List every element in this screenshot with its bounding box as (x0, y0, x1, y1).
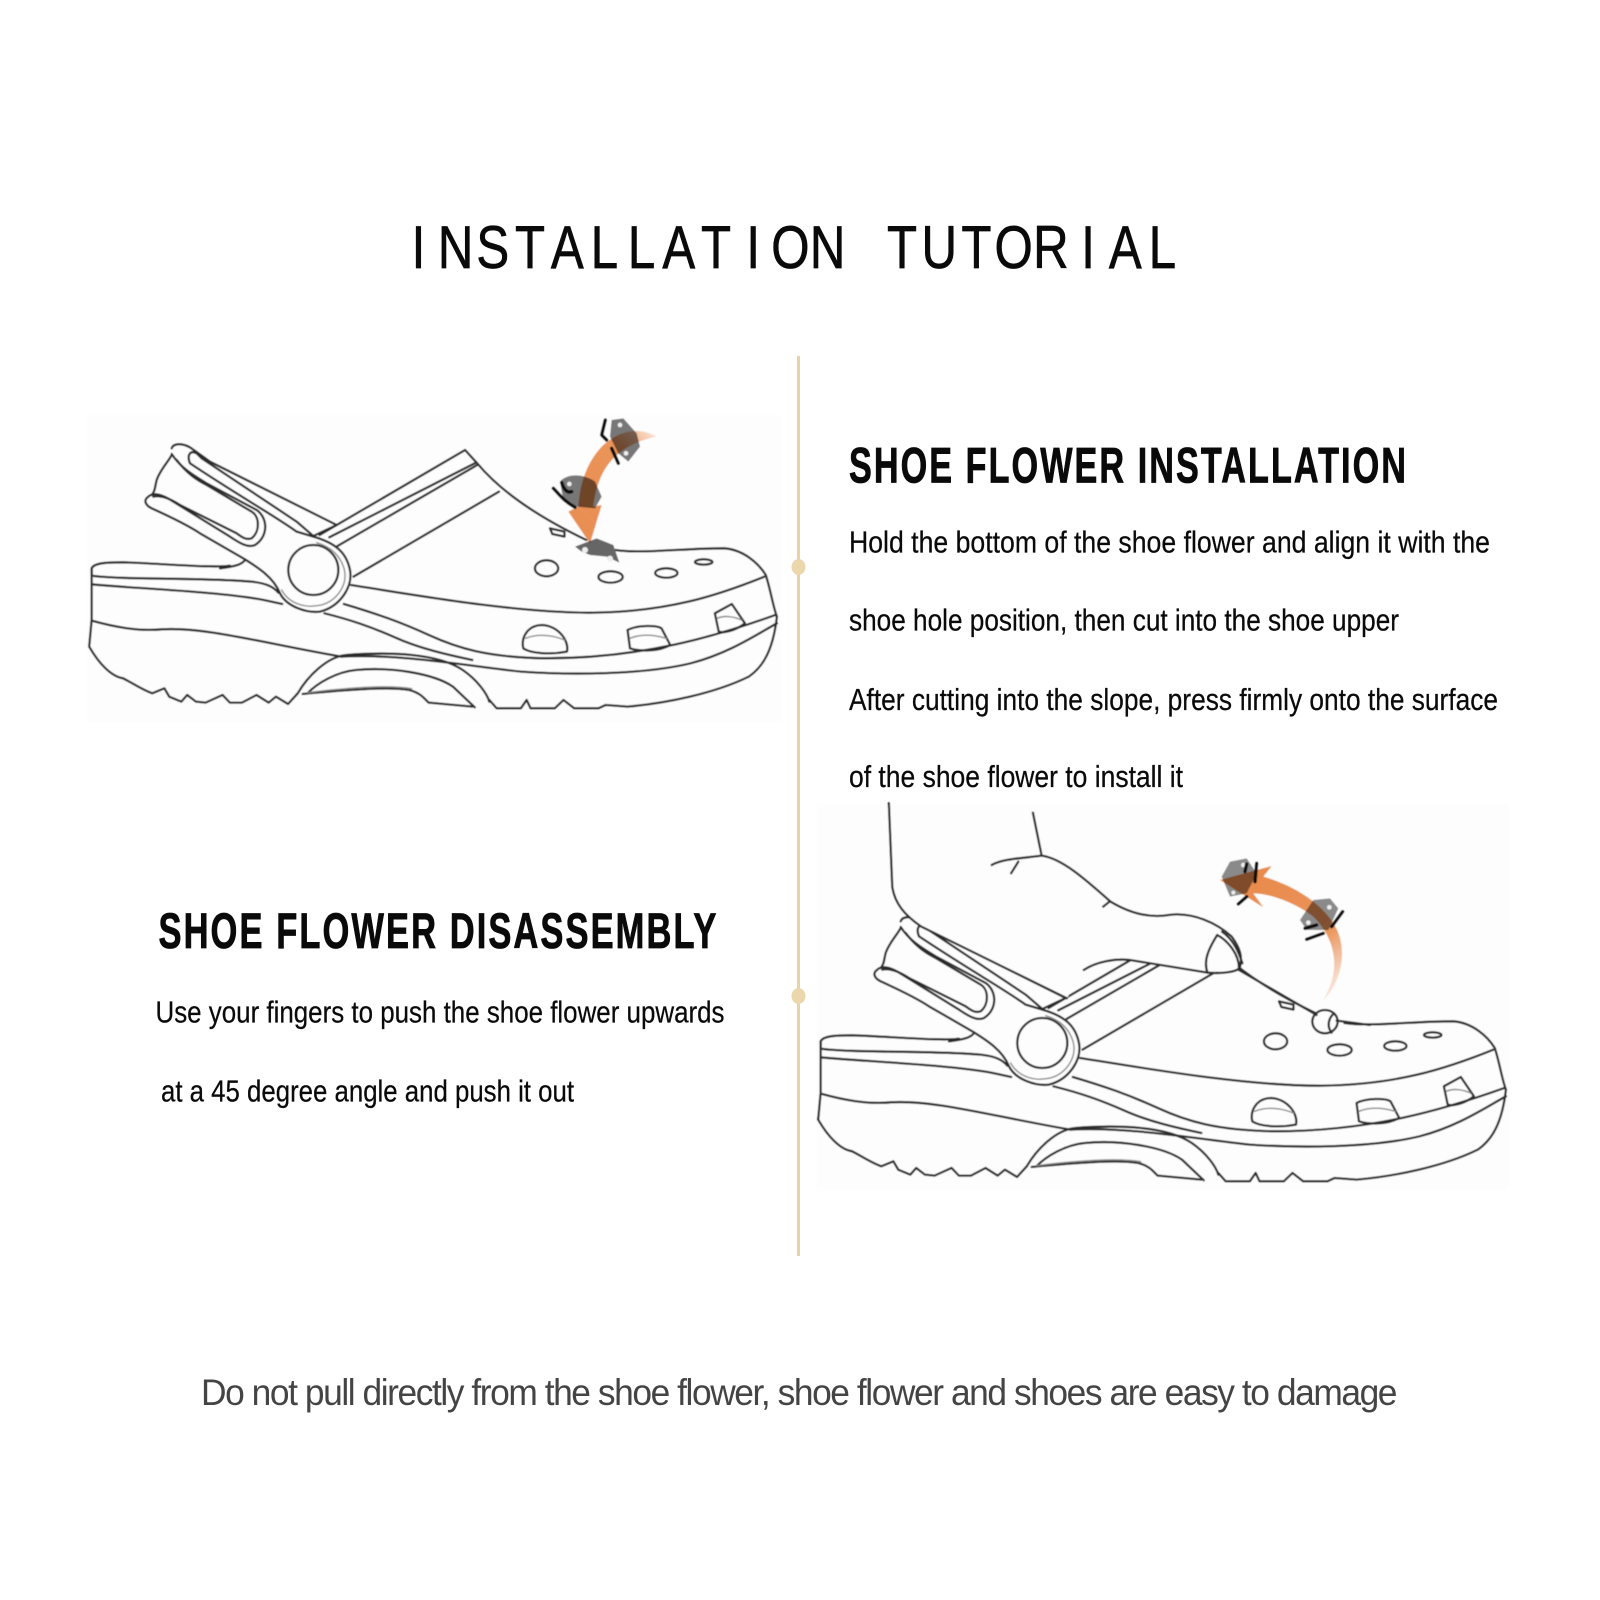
heel strap and rivet (874, 917, 1079, 1085)
panel: shoe with flower being installed (87, 415, 781, 722)
shoe line drawing (818, 923, 1506, 1181)
flower: pushed button (1312, 1010, 1370, 1033)
text block: installation steps: shoe hole position, then cut into the shoe upper (849, 603, 1399, 638)
shoe line drawing (89, 450, 777, 708)
panel: shoe with finger pushing flower out (817, 803, 1509, 1190)
text block: disassembly steps: at a 45 degree angle and push it out (161, 1074, 574, 1109)
flower: seated on shoe (575, 538, 619, 563)
flower: lifted right (1300, 898, 1343, 939)
heel strap and rivet (145, 444, 350, 612)
arrow: orange downward (568, 431, 657, 543)
text block: disassembly steps (156, 995, 724, 1109)
arrow: orange upward (1220, 866, 1342, 1000)
title: INSTALLATION TUTORIAL (412, 213, 1176, 281)
flower: lifted left (1222, 858, 1257, 904)
text block: installation steps (849, 525, 1498, 794)
footer warning: Do not pull directly from the shoe flower, shoe flower and shoes are easy to damage (201, 1372, 1396, 1413)
flower: middle (553, 475, 602, 508)
hand pushing (889, 803, 1317, 1015)
heading: shoe flower disassembly: SHOE FLOWER DISASSEMBLY (158, 903, 718, 959)
text block: installation steps: Hold the bottom of the shoe flower and align it with the (849, 525, 1490, 560)
flower: top (602, 418, 640, 463)
text block: installation steps: of the shoe flower to install it (849, 759, 1183, 794)
center divider with markers (792, 356, 806, 1256)
text block: installation steps: After cutting into the slope, press firmly onto the surface (849, 682, 1498, 717)
text block: disassembly steps: Use your fingers to push the shoe flower upwards (156, 995, 724, 1030)
